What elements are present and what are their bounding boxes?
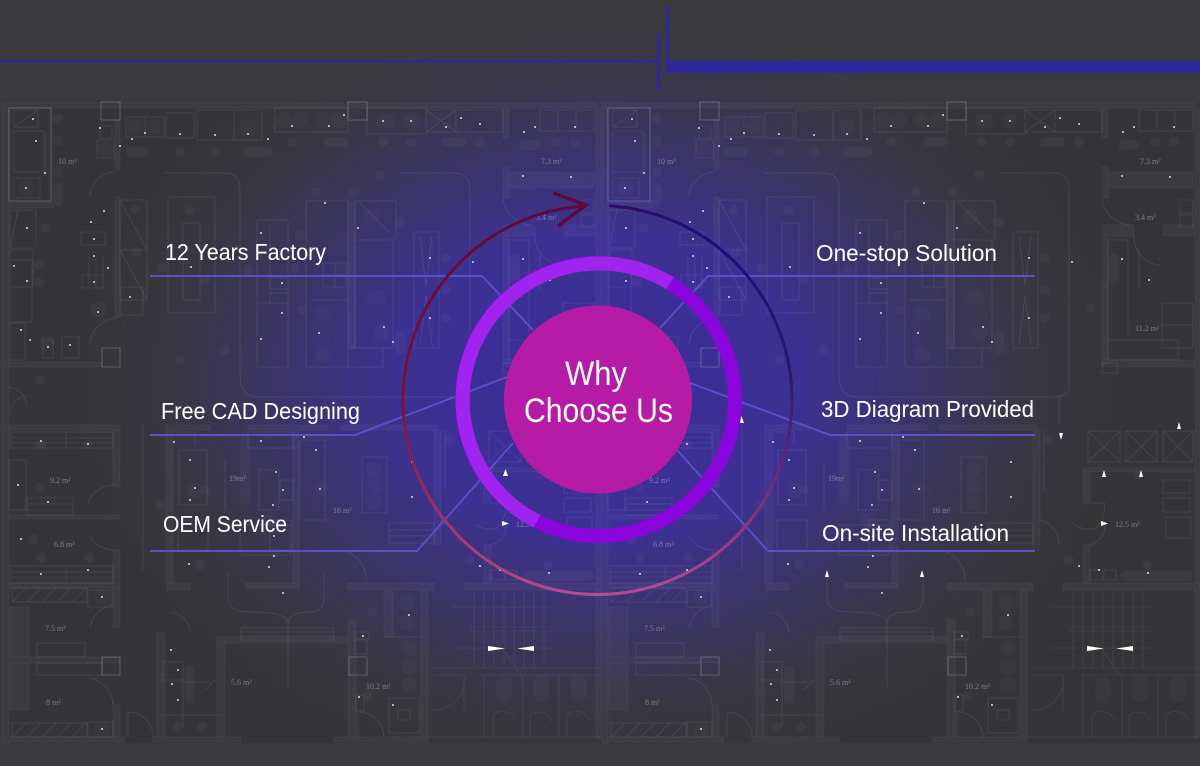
floor plan background: 7.5 m² [45,624,66,633]
feature labels: Free CAD Designing [161,398,360,424]
centre title: Why [565,355,627,393]
floor plan background: 16 m² [333,506,352,515]
outer circular arrow [403,193,792,594]
floor plan background: 9.2 m² [50,476,71,485]
floor plan background: 5.6 m² [231,678,252,687]
floor plan background: 10 m² [58,157,77,166]
floor plan background: 10.2 m² [366,682,391,691]
floor plan background: 7.3 m² [1140,157,1161,166]
feature labels: OEM Service [163,511,287,537]
floor plan background: 3.4 m² [536,213,557,222]
floor plan background: 8 m² [46,698,61,707]
purple ring [462,263,735,536]
floor plan background: 19m² [828,474,845,483]
floor plan background: 7.5 m² [644,624,665,633]
floor plan background: 8 m² [645,698,660,707]
floor plan background: 6.8 m² [653,540,674,549]
centre title: Choose Us [524,392,673,430]
floor plan background: 11.2 m² [1135,324,1160,333]
top decorative bars [0,5,1200,90]
floor plan background: 6.8 m² [54,540,75,549]
feature labels: One-stop Solution [816,240,997,266]
floor plan background: 16 m² [932,506,951,515]
floor plan background: 10.2 m² [965,682,990,691]
floor plan background: 9.2 m² [649,476,670,485]
floor plan background: 5.6 m² [830,678,851,687]
centre circle [504,306,692,494]
floor plan background: 19m² [229,474,246,483]
floor plan background: 10 m² [657,157,676,166]
feature labels: On-site Installation [822,520,1009,546]
floor plan background: 12.5 m² [516,520,541,529]
connector lines [150,276,1035,551]
centre title [524,355,673,430]
floor plan background: 3.4 m² [1135,213,1156,222]
floor plan background: 12.5 m² [1115,520,1140,529]
feature labels: 3D Diagram Provided [821,396,1034,422]
feature labels [161,239,1034,546]
feature labels: 12 Years Factory [165,239,326,265]
floor plan background: 7.3 m² [541,157,562,166]
